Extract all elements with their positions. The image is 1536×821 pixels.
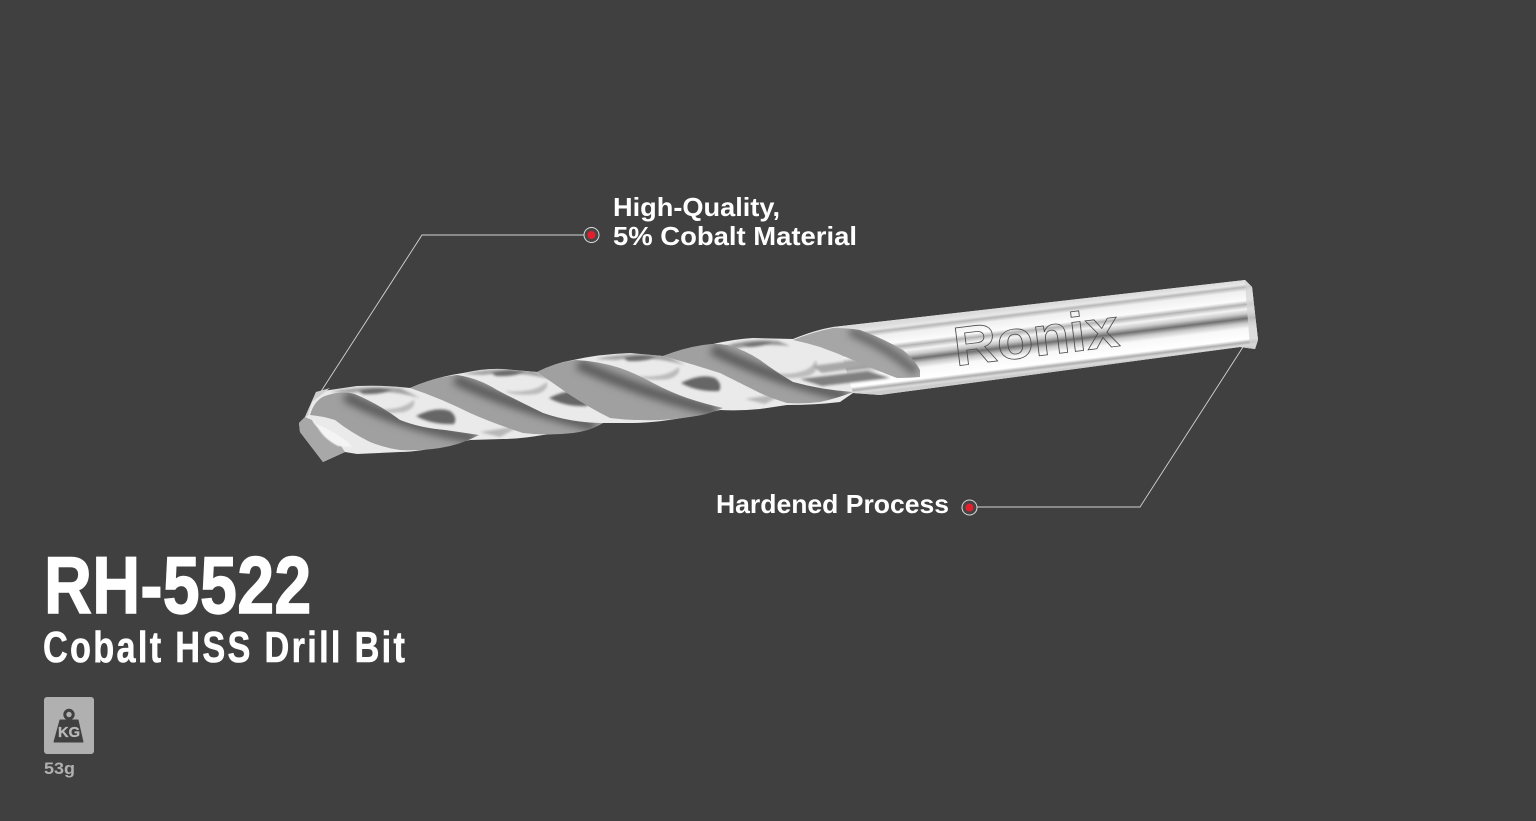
leader line [977,347,1243,507]
icon: weight: KG [58,725,80,741]
drill tip [299,417,345,462]
drill tip shoulder [305,388,330,417]
engraved brand text: Ronix [950,296,1123,378]
flute lobe 2 [410,375,603,434]
callout text: 5% Cobalt Material [613,221,857,251]
drill bit [299,280,1258,462]
drill tip highlight [316,424,352,447]
flute lobe 1 [310,392,479,450]
drill bit body [299,280,1258,462]
callout text: High-Quality, [613,192,780,222]
flute lobe 4 [663,344,853,404]
flute B marks [464,369,588,408]
shank end chamfer [1245,280,1258,349]
shank [833,280,1258,395]
flute lobe 5 [793,328,920,378]
flute C marks [595,354,785,404]
callout text [613,192,857,251]
icon: weight [44,697,94,754]
flute A marks [330,387,520,437]
marker dot [584,228,599,242]
leader line [320,235,584,393]
marker dot [962,500,977,515]
flute D marks [725,340,890,386]
model number: RH-5522 [44,540,311,630]
weight value: 53g [44,759,75,778]
flute lobe 3 [537,360,723,420]
flute shading [330,340,890,437]
callout: bottom [716,347,1243,519]
callout text: Hardened Process [716,489,949,519]
product name: Cobalt HSS Drill Bit [43,623,405,672]
callout: top [320,192,857,393]
